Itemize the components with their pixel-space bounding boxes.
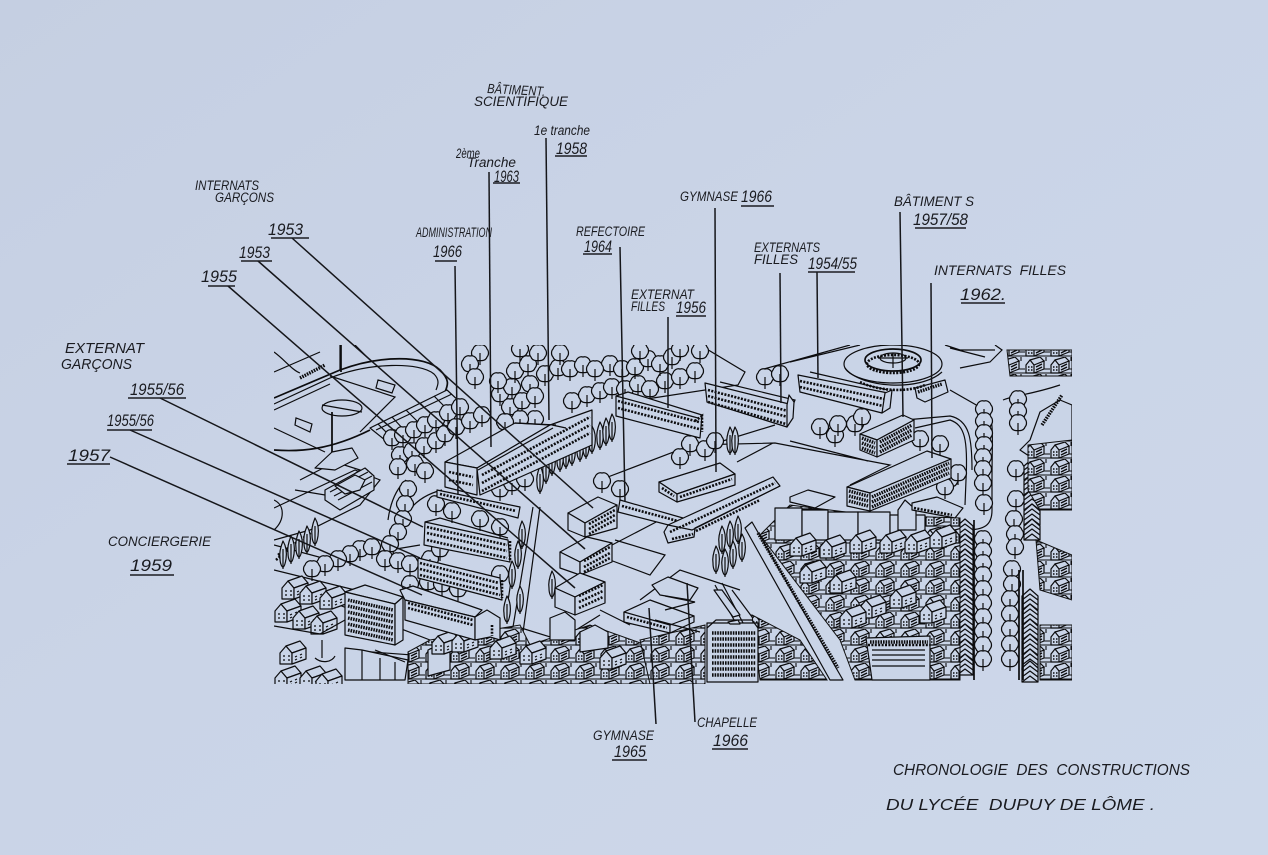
label: bâtiment S 1957/58: 1957/58 (913, 210, 968, 229)
label: 2e tranche 1963: 2ème (455, 146, 480, 161)
label: externat garçons (61, 340, 146, 373)
label: bâtiment scientifique (474, 81, 569, 109)
roads and grounds (274, 345, 1060, 660)
label: chapelle 1966: 1966 (713, 731, 748, 750)
title: chronologie des constructions du lycée Dupuy de Lôme: DU LYCÉE DUPUY DE LÔME . (886, 795, 1155, 814)
label: chapelle 1966: CHAPELLE (697, 715, 758, 730)
title: chronologie des constructions du lycée Dupuy de Lôme: CHRONOLOGIE DES CONSTRUCTIONS (893, 762, 1190, 779)
aerial line drawing of the school campus (274, 341, 1072, 692)
label: internats filles 1962: 1962. (960, 285, 1006, 304)
bottom-centre housing (408, 612, 705, 684)
leader: 1957 (110, 457, 422, 595)
label: 1re tranche 1958: 1958 (556, 139, 587, 158)
conciergerie tower (345, 585, 403, 645)
boys' external slab 1955/56 upper (424, 518, 510, 562)
label: 1953 upper: 1953 (268, 220, 303, 239)
label: administration 1966: ADMINISTRATION (415, 225, 492, 240)
label: externat filles 1956: EXTERNAT (631, 287, 696, 302)
leader: refectoire (620, 247, 625, 502)
label: gymnase 1966: 1966 (741, 187, 772, 206)
girls' external slab 1956 (616, 392, 702, 438)
leader: externat filles 1956 (667, 317, 669, 408)
low block 1957 (400, 586, 500, 640)
label: 1re tranche 1958 (534, 123, 590, 158)
label: conciergerie 1959: 1959 (130, 556, 173, 575)
leader: externats filles west (780, 273, 781, 403)
label: conciergerie 1959 (108, 534, 212, 575)
label: bâtiment S 1957/58: BÂTIMENT S (894, 194, 974, 209)
label: 1955/56 upper: 1955/56 (130, 380, 184, 399)
label: bâtiment scientifique: BÂTIMENT, (487, 81, 546, 99)
label: gymnase 1966 (680, 187, 774, 206)
leader: internat garcons 1955 (228, 286, 575, 588)
label: 1re tranche 1958: 1e tranche (534, 123, 590, 138)
label: internats garçons (195, 178, 274, 205)
label: conciergerie 1959: CONCIERGERIE (108, 534, 212, 549)
label: externat garçons: EXTERNAT (65, 340, 146, 357)
girls' boarding block 1962 (847, 451, 951, 511)
leader: internats filles (931, 283, 932, 458)
label: externat filles 1956: 1956 (676, 298, 706, 317)
gymnasium 1966 (659, 463, 735, 502)
girls' external slab 1954/55 east (798, 372, 892, 413)
gymnasium 1965 (624, 600, 694, 633)
leader: 1958 (546, 138, 549, 420)
leader: gymnase 1965 (649, 608, 656, 724)
round building top right (844, 345, 948, 402)
residential tower bottom centre (707, 590, 758, 682)
label: internats garçons: GARÇONS (215, 190, 274, 205)
label: bâtiment S 1957/58 (894, 194, 974, 229)
boys' boarding cubes (555, 497, 617, 615)
leader: batiment S (900, 212, 903, 417)
low building below science block (437, 490, 520, 518)
leader: internat garcons 1953 upper (292, 238, 593, 508)
label: bâtiment scientifique: SCIENTIFIQUE (474, 94, 569, 109)
label: 1957: 1957 (68, 446, 111, 465)
label: administration 1966: 1966 (433, 242, 462, 261)
dense housing district (745, 500, 960, 680)
leader: administration (455, 266, 458, 495)
title: chronologie des constructions du lycée Dupuy de Lôme (886, 762, 1190, 814)
label: gymnase 1965: GYMNASE (593, 728, 655, 743)
label: 2e tranche 1963 (455, 146, 520, 186)
label: externat garçons: GARÇONS (61, 356, 132, 373)
stadium (274, 345, 460, 455)
chapel 1966 (652, 577, 700, 632)
sports ground huts and lower-left grounds (276, 448, 374, 560)
leader: externat garcons upper (160, 398, 423, 527)
label: internats filles 1962: INTERNATS FILLES (934, 263, 1066, 278)
bâtiment S (860, 415, 914, 457)
bottom-left housing (274, 576, 408, 692)
label: externat filles 1956 (631, 287, 706, 317)
low building east (790, 490, 963, 518)
label: 2e tranche 1963: 1963 (494, 167, 519, 186)
label: réfectoire 1964: REFECTOIRE (576, 224, 646, 239)
label: gymnase 1966: GYMNASE (680, 189, 739, 204)
girls' external slab 1954/55 west (705, 382, 795, 427)
label: internats garçons: INTERNATS (195, 178, 259, 193)
label: réfectoire 1964 (576, 224, 646, 256)
label: 2e tranche 1963: Tranche (467, 155, 516, 170)
label: gymnase 1965: 1965 (614, 742, 646, 761)
leader: chapelle (687, 583, 695, 722)
leader: gymnase 1966 (715, 208, 716, 472)
label: 1953 middle: 1953 (239, 243, 270, 262)
label: externats filles 1954/55 (754, 240, 857, 273)
refectory 1964 (618, 477, 780, 543)
label: externats filles 1954/55: FILLES (754, 252, 798, 267)
leader: externats filles east (817, 272, 818, 378)
label: externat filles 1956: FILLES (631, 299, 665, 314)
label: 1955: 1955 (201, 267, 238, 286)
leader: internat garcons 1953 middle (258, 261, 585, 549)
leader: 1963 (489, 172, 491, 447)
tree groups (280, 341, 966, 624)
right avenue of trees (957, 391, 1040, 682)
label: administration 1966 (415, 225, 492, 261)
label: réfectoire 1964: 1964 (584, 237, 612, 256)
right-hand neighbourhood (945, 345, 1072, 680)
label: externats filles 1954/55: 1954/55 (808, 254, 857, 273)
leader: externat garcons lower (130, 430, 420, 558)
science building (tranche 1 and 2) (445, 410, 592, 495)
label: internats filles 1962 (934, 263, 1066, 304)
label: gymnase 1965 (593, 728, 655, 761)
label: chapelle 1966 (697, 715, 758, 750)
label: externats filles 1954/55: EXTERNATS (754, 240, 820, 255)
boys' external slab 1955/56 lower (418, 558, 502, 600)
label: 1955/56 lower: 1955/56 (107, 411, 154, 430)
